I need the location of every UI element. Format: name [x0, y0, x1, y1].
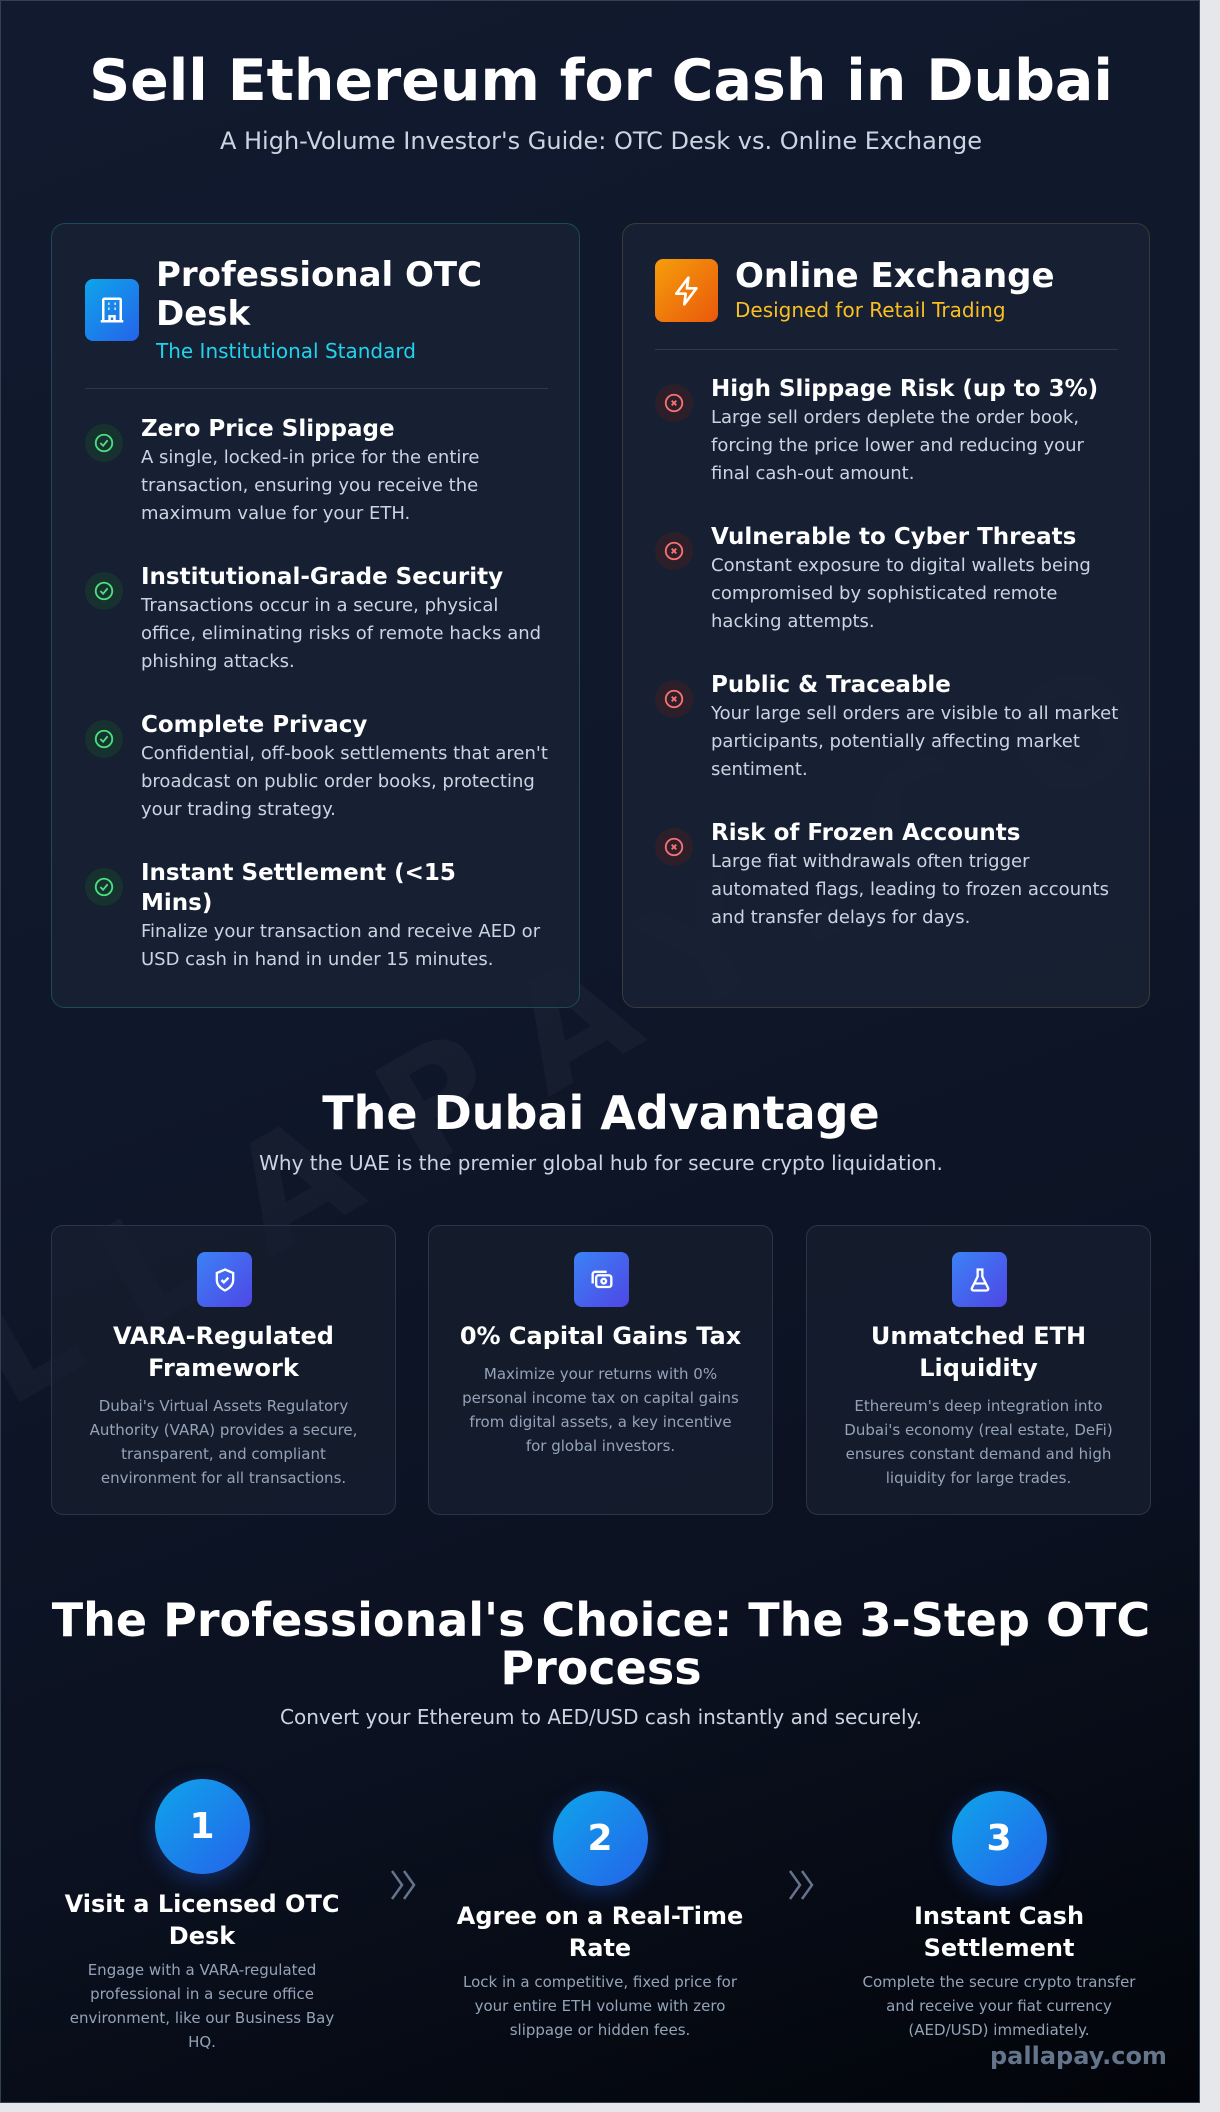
item: security: Institutional-Grade Security: [141, 564, 503, 590]
subheading: process: Convert your Ethereum to AED/USD cash instantly and securely.: [280, 1705, 922, 1729]
item: frozen accounts: Risk of Frozen Accounts: [711, 820, 1020, 846]
step 3: [863, 1786, 1136, 2039]
arrow 1: [391, 1870, 416, 1900]
arrow 2: [789, 1870, 814, 1900]
heading: OTC desk: Professional OTC Desk: [156, 255, 482, 334]
item: frozen accounts: Large fiat withdrawals often trigger automated flags, leading to frozen accounts and transfer delays for days.: [711, 851, 1109, 928]
item: slippage risk: Large sell orders deplete the order book, forcing the price lower and reducing your final cash-out amount.: [711, 407, 1084, 484]
item: slippage risk: High Slippage Risk (up to 3%): [711, 376, 1098, 402]
panel: liquidity: [806, 1225, 1151, 1515]
step 1: [64, 1775, 339, 2051]
item: cyber threats: Vulnerable to Cyber Threats: [711, 524, 1076, 550]
panel: tax: Maximize your returns with 0% personal income tax on capital gains from digital assets, a key incentive for global investors.: [462, 1365, 739, 1455]
panel: professional OTC desk: [51, 223, 580, 1008]
brand watermark: pallapay.com: [990, 2042, 1167, 2070]
icon: cash: [574, 1252, 629, 1307]
item: traceable: [655, 672, 1118, 780]
item: privacy: [85, 712, 548, 820]
panel: VARA: VARA-Regulated Framework: [113, 1322, 334, 1382]
icon: shield: [197, 1252, 252, 1307]
item: cyber threats: Constant exposure to digital wallets being compromised by sophisticated remote hacking attempts.: [711, 555, 1091, 632]
item: security: [85, 564, 541, 672]
item: instant settlement: Finalize your transaction and receive AED or USD cash in hand in under 15 minutes.: [141, 921, 540, 970]
panel: tax: [428, 1225, 773, 1515]
step 1: 1: [189, 1806, 215, 1847]
step 3: 3: [986, 1818, 1012, 1859]
subheading: Dubai advantage: Why the UAE is the premier global hub for secure crypto liquidation.: [259, 1151, 943, 1175]
item: zero slippage: A single, locked-in price for the entire transaction, ensuring you receive the maximum value for your ETH.: [141, 447, 479, 524]
heading: online exchange: Online Exchange: [735, 256, 1055, 296]
step 1: Visit a Licensed OTC Desk: [65, 1890, 339, 1950]
item: privacy: Complete Privacy: [141, 712, 367, 738]
step 1: Engage with a VARA-regulated professional in a secure office environment, like our Business Bay HQ.: [70, 1961, 334, 2051]
item: privacy: Confidential, off-book settlements that aren't broadcast on public order books, protecting your trading strategy.: [141, 743, 548, 820]
subheading: Designed for Retail Trading: [735, 298, 1006, 322]
panel: VARA: Dubai's Virtual Assets Regulatory Authority (VARA) provides a secure, transparent, and compliant environment for all transactions.: [90, 1397, 357, 1487]
item: traceable: Public & Traceable: [711, 672, 951, 698]
icon: flask: [952, 1252, 1007, 1307]
panel: tax: 0% Capital Gains Tax: [460, 1322, 741, 1350]
panel: liquidity: Unmatched ETH Liquidity: [871, 1322, 1086, 1382]
item: zero slippage: [85, 416, 479, 524]
icon: building: [85, 279, 139, 341]
step 2: [456, 1787, 743, 2039]
step 2: Agree on a Real-Time Rate: [457, 1902, 743, 1962]
panel: liquidity: Ethereum's deep integration into Dubai's economy (real estate, DeFi) ensures constant demand and high liquidity for large trades.: [844, 1397, 1113, 1487]
panel: online exchange: [622, 223, 1150, 1008]
item: slippage risk: [655, 376, 1098, 484]
item: zero slippage: Zero Price Slippage: [141, 416, 395, 442]
step 3: Complete the secure crypto transfer and receive your fiat currency (AED/USD) immediately.: [863, 1973, 1135, 2039]
item: traceable: Your large sell orders are visible to all market participants, potentially affecting market sentiment.: [711, 703, 1118, 780]
heading: Dubai advantage: The Dubai Advantage: [322, 1086, 880, 1140]
step 3: Instant Cash Settlement: [914, 1902, 1084, 1962]
icon: lightning: [655, 259, 718, 322]
step 2: Lock in a competitive, fixed price for your entire ETH volume with zero slippage or hidden fees.: [463, 1973, 737, 2039]
item: cyber threats: [655, 524, 1091, 632]
item: security: Transactions occur in a secure, physical office, eliminating risks of remote hacks and phishing attacks.: [141, 595, 541, 672]
heading: 3-step process: The Professional's Choice: The 3-Step OTC Process: [52, 1593, 1150, 1695]
item: instant settlement: [85, 860, 540, 970]
subheading: The Institutional Standard: [156, 339, 416, 363]
step 2: 2: [587, 1818, 613, 1859]
item: frozen accounts: [655, 820, 1109, 928]
title: Sell Ethereum for Cash in Dubai: [89, 48, 1113, 114]
subtitle: A High-Volume Investor's Guide: OTC Desk vs. Online Exchange: [220, 127, 982, 155]
item: instant settlement: Instant Settlement (<15 Mins): [141, 860, 456, 916]
panel: VARA: [51, 1225, 396, 1515]
